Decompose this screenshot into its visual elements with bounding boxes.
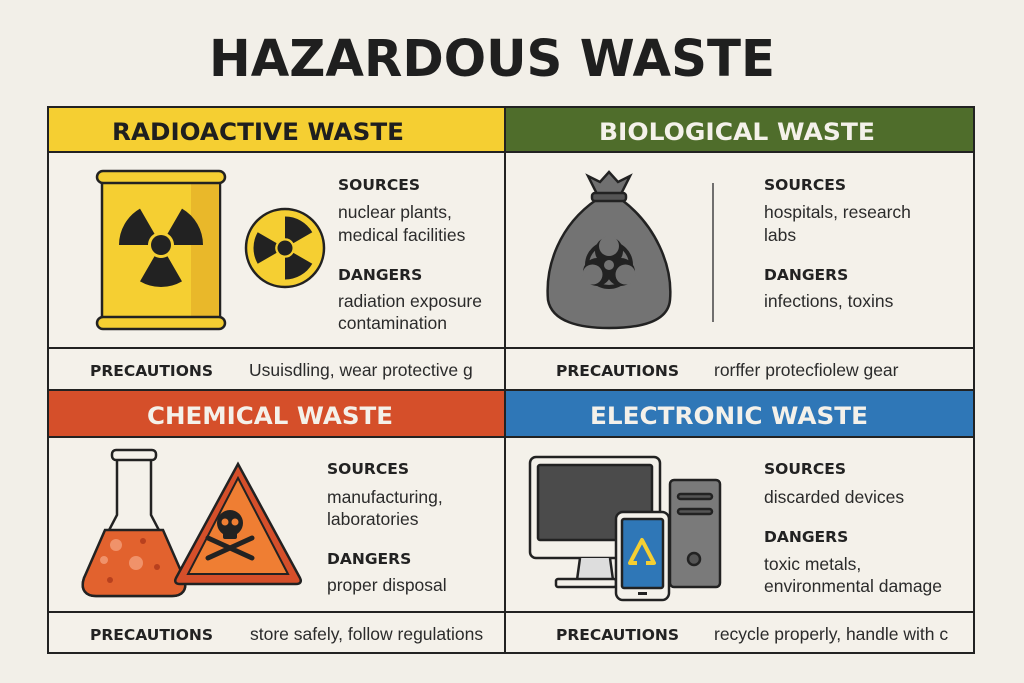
header: electronic — [505, 390, 974, 437]
header: biological — [505, 107, 974, 152]
text: sources/dangers: SOURCES — [764, 460, 846, 478]
text: sources/dangers: hospitals, research — [764, 202, 911, 222]
precautions row — [48, 612, 505, 653]
header: radioactive — [48, 107, 505, 152]
text: sources/dangers: DANGERS — [327, 550, 411, 568]
precautions row: PRECAUTIONS — [90, 362, 213, 380]
text: sources/dangers: DANGERS — [764, 266, 848, 284]
header: electronic: ELECTRONIC WASTE — [590, 402, 868, 430]
text: sources/dangers — [327, 460, 447, 595]
icon: yellow barrel — [97, 171, 225, 329]
header: biological: BIOLOGICAL WASTE — [599, 118, 875, 146]
text: sources/dangers: SOURCES — [327, 460, 409, 478]
text: sources/dangers — [764, 460, 942, 596]
header: radioactive: RADIOACTIVE WASTE — [112, 118, 404, 146]
icon: flask — [83, 450, 185, 596]
text: sources/dangers: laboratories — [327, 509, 419, 529]
text: sources/dangers: DANGERS — [338, 266, 422, 284]
header: chemical: CHEMICAL WASTE — [147, 402, 393, 430]
title: HAZARDOUS WASTE — [209, 30, 775, 89]
text: sources/dangers: infections, toxins — [764, 291, 894, 311]
text: sources/dangers: discarded devices — [764, 487, 904, 507]
precautions row — [505, 348, 974, 390]
text: sources/dangers: SOURCES — [764, 176, 846, 194]
divider line — [712, 183, 714, 322]
precautions row: store safely, follow regulations — [250, 624, 483, 644]
text: sources/dangers: proper disposal — [327, 575, 447, 595]
precautions row: PRECAUTIONS — [556, 362, 679, 380]
precautions row: rorffer protecfiolew gear — [714, 360, 899, 380]
text: sources/dangers: contamination — [338, 313, 447, 333]
precautions row: PRECAUTIONS — [90, 626, 213, 644]
precautions row: PRECAUTIONS — [556, 626, 679, 644]
panel: chemical waste — [48, 390, 505, 653]
icon: computer and phone — [530, 457, 720, 600]
precautions row — [48, 348, 505, 390]
text: sources/dangers: toxic metals, — [764, 554, 861, 574]
text: sources/dangers — [764, 176, 911, 311]
precautions row — [505, 612, 974, 653]
panel: electronic waste — [505, 390, 974, 653]
center divider — [504, 107, 506, 653]
text: sources/dangers — [338, 176, 482, 333]
panel: radioactive waste — [48, 107, 505, 390]
icon: poison warning triangle — [175, 464, 301, 584]
icon: biohazard bag — [548, 172, 670, 328]
grid panel background — [48, 107, 974, 653]
header: chemical — [48, 390, 505, 437]
text: sources/dangers: radiation exposure — [338, 291, 482, 311]
text: sources/dangers: DANGERS — [764, 528, 848, 546]
panel: biological waste — [505, 107, 974, 390]
text: sources/dangers: labs — [764, 225, 796, 245]
text: sources/dangers: SOURCES — [338, 176, 420, 194]
text: sources/dangers: manufacturing, — [327, 487, 443, 507]
precautions row: Usuisdling, wear protective g — [249, 360, 473, 380]
text: sources/dangers: environmental damage — [764, 576, 942, 596]
text: sources/dangers: medical facilities — [338, 225, 466, 245]
precautions row: recycle properly, handle with c — [714, 624, 948, 644]
icon: radiation sign — [237, 209, 333, 303]
text: sources/dangers: nuclear plants, — [338, 202, 452, 222]
